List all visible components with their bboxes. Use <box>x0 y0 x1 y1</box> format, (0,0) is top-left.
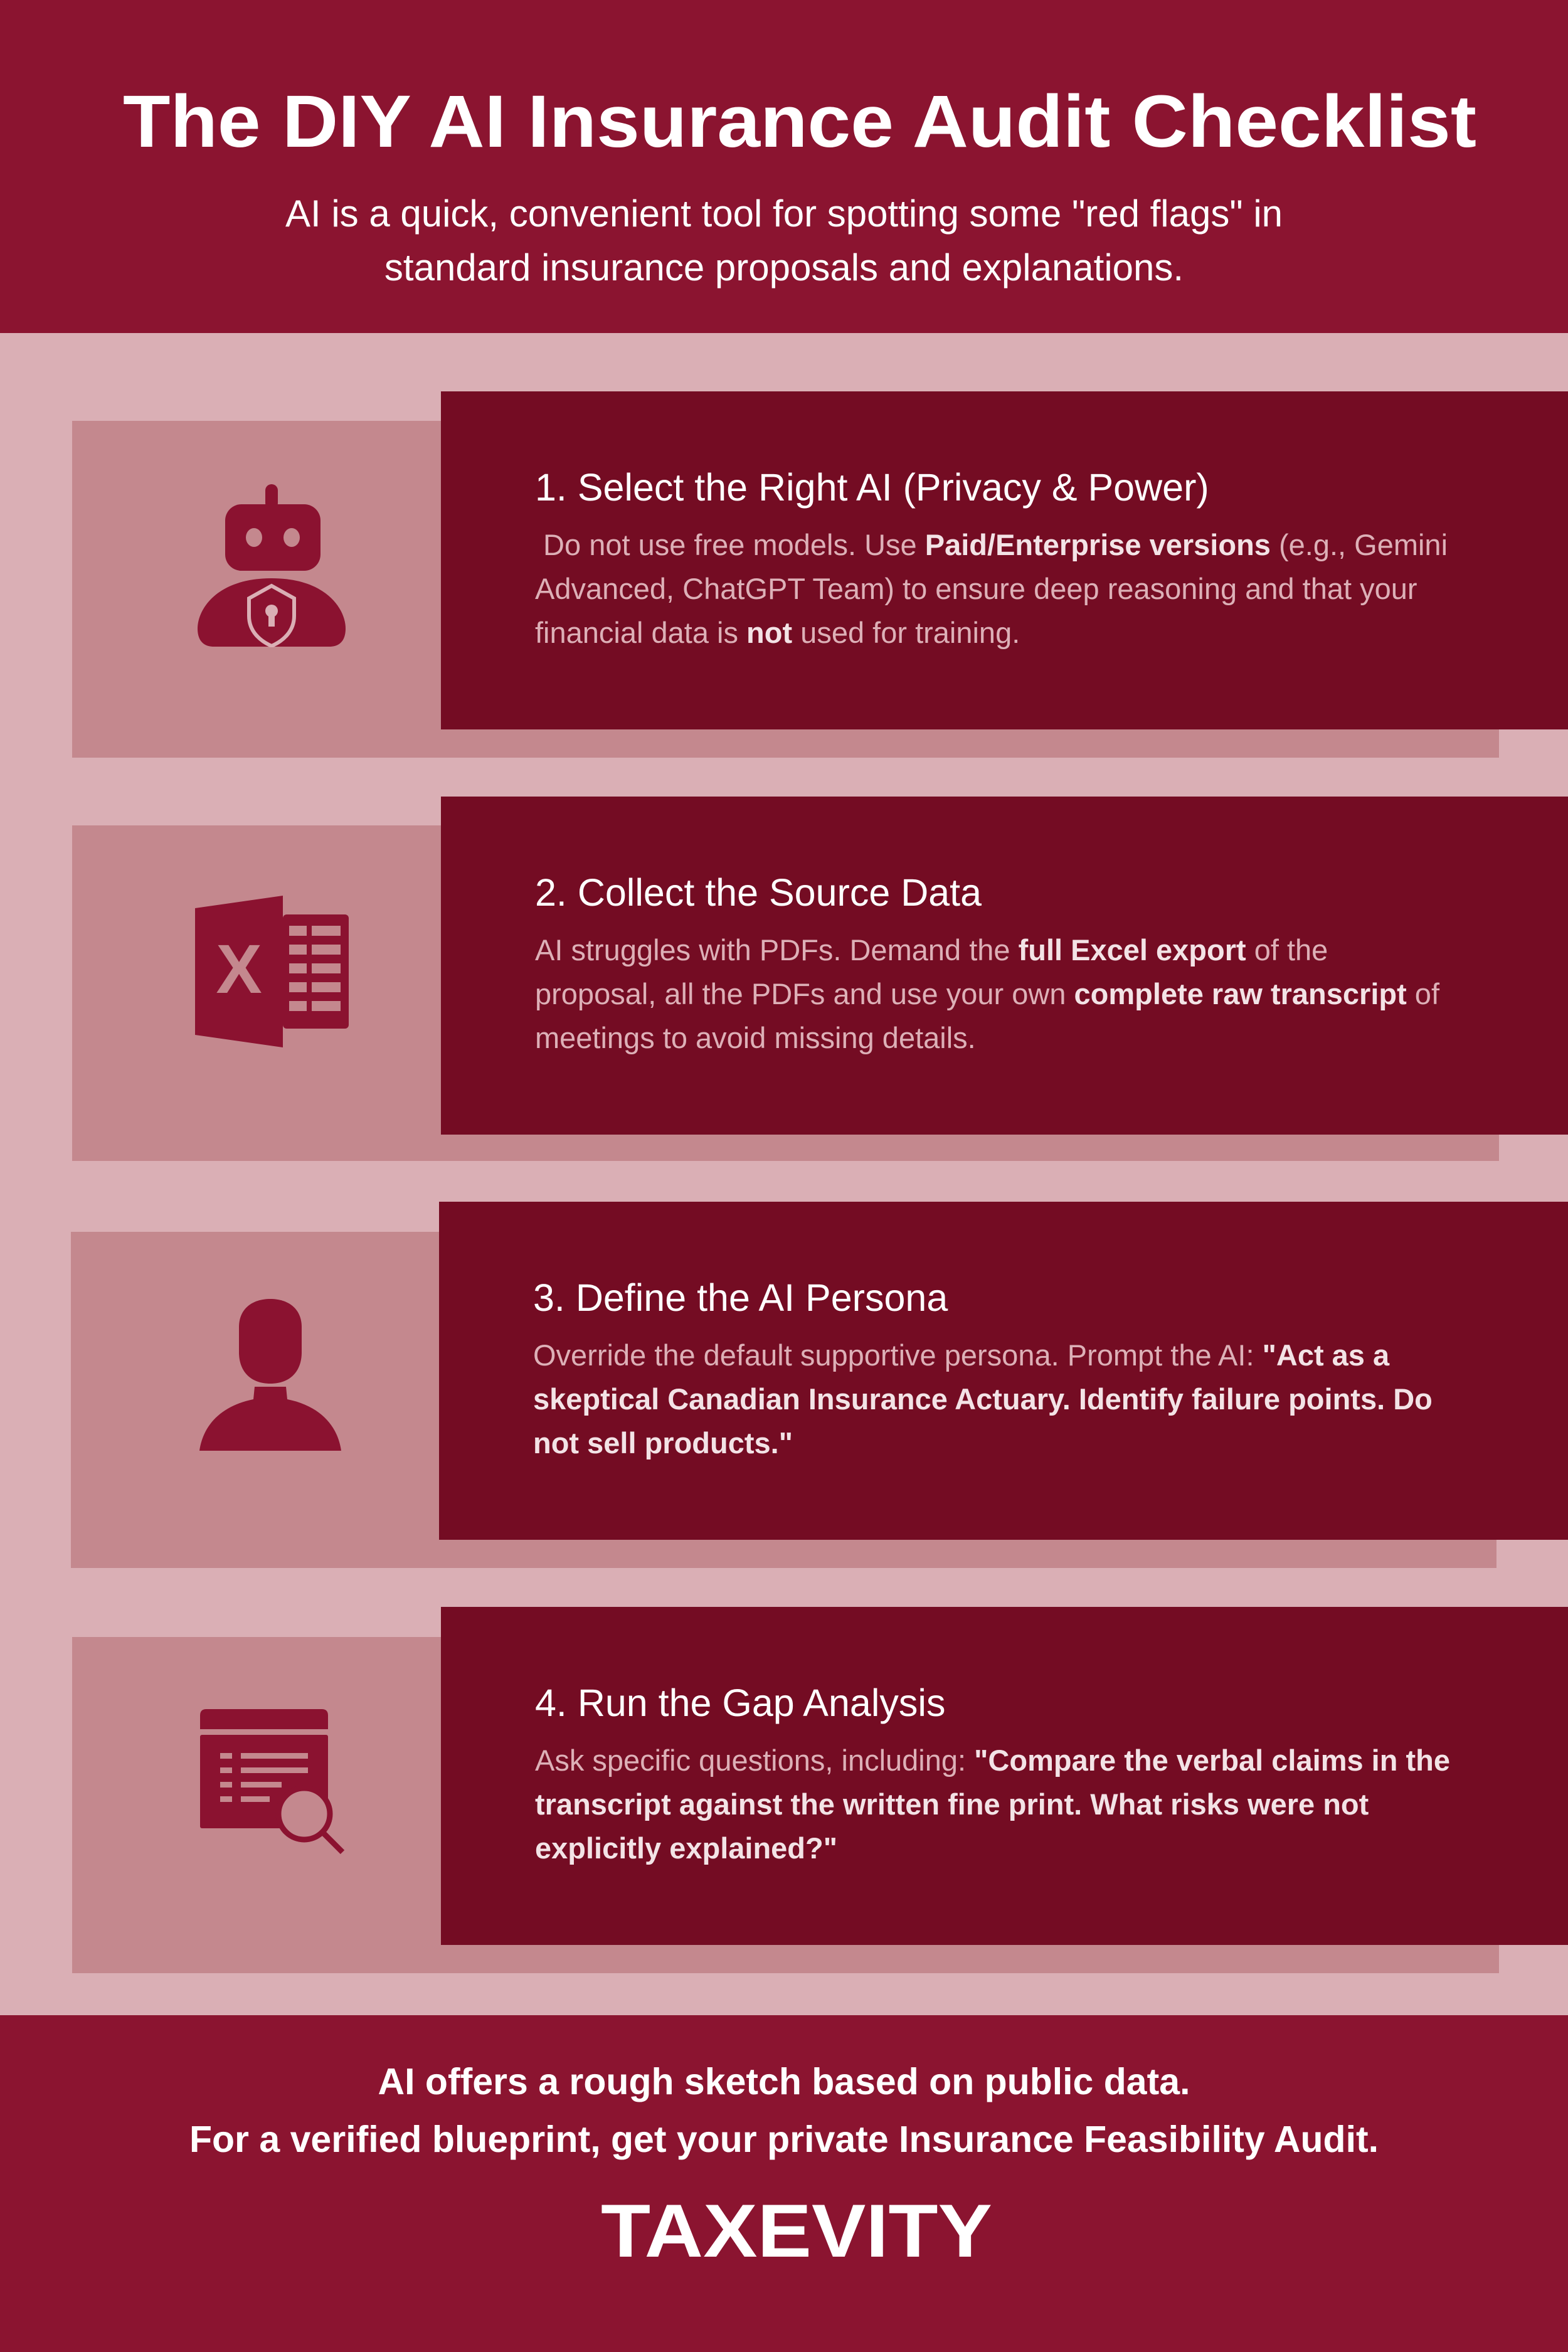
body 2: AI struggles with PDFs. Demand the full Excel export of the <box>535 933 1328 967</box>
panel 2: collect data <box>72 797 1568 1161</box>
body 2: proposal, all the PDFs and use your own complete raw transcript of <box>535 977 1439 1010</box>
subtitle: AI is a quick, convenient tool for spotting some "red flags" in <box>285 193 1283 235</box>
subtitle: standard insurance proposals and explanations. <box>384 246 1184 289</box>
body 3: not sell products." <box>533 1426 793 1459</box>
body 2: meetings to avoid missing details. <box>535 1021 976 1054</box>
body 1: Do not use free models. Use Paid/Enterprise versions (e.g., Gemini <box>543 528 1448 561</box>
footer text: AI offers a rough sketch based on public data. <box>378 2061 1190 2102</box>
icon: document with magnifier <box>200 1709 345 1854</box>
heading 4: 4. Run the Gap Analysis <box>535 1682 945 1724</box>
body 1 <box>535 528 1448 649</box>
panel 1: select AI <box>72 391 1568 758</box>
subtitle <box>285 193 1283 289</box>
panel 3: persona <box>71 1202 1568 1568</box>
logo: TAXEVITY: TAXEVITY <box>601 2189 992 2272</box>
footer band <box>0 2015 1568 2352</box>
body 3 <box>533 1338 1433 1459</box>
icon: person <box>199 1299 341 1451</box>
heading 2: 2. Collect the Source Data <box>535 871 982 914</box>
footer text: For a verified blueprint, get your private Insurance Feasibility Audit. <box>189 2119 1379 2160</box>
panel 4: gap analysis <box>72 1607 1568 1973</box>
footer text <box>189 2061 1379 2160</box>
icon: excel: X <box>216 931 262 1008</box>
title: The DIY AI Insurance Audit Checklist <box>123 80 1476 163</box>
body 4 <box>535 1744 1450 1865</box>
body 4: explicitly explained?" <box>535 1831 837 1865</box>
body 3: Override the default supportive persona. Prompt the AI: "Act as a <box>533 1338 1389 1372</box>
body 3: skeptical Canadian Insurance Actuary. Identify failure points. Do <box>533 1382 1433 1416</box>
header band <box>0 0 1568 333</box>
heading 1: 1. Select the Right AI (Privacy & Power) <box>535 466 1209 509</box>
icon: excel <box>195 896 349 1047</box>
heading 3: 3. Define the AI Persona <box>533 1276 948 1319</box>
body 1: financial data is not used for training. <box>535 616 1020 649</box>
icon: robot with shield <box>198 484 346 647</box>
body 1: Advanced, ChatGPT Team) to ensure deep reasoning and that your <box>535 572 1417 605</box>
body 4: transcript against the written fine print. What risks were not <box>535 1788 1369 1821</box>
body 4: Ask specific questions, including: "Compare the verbal claims in the <box>535 1744 1450 1777</box>
body 2 <box>535 933 1440 1054</box>
